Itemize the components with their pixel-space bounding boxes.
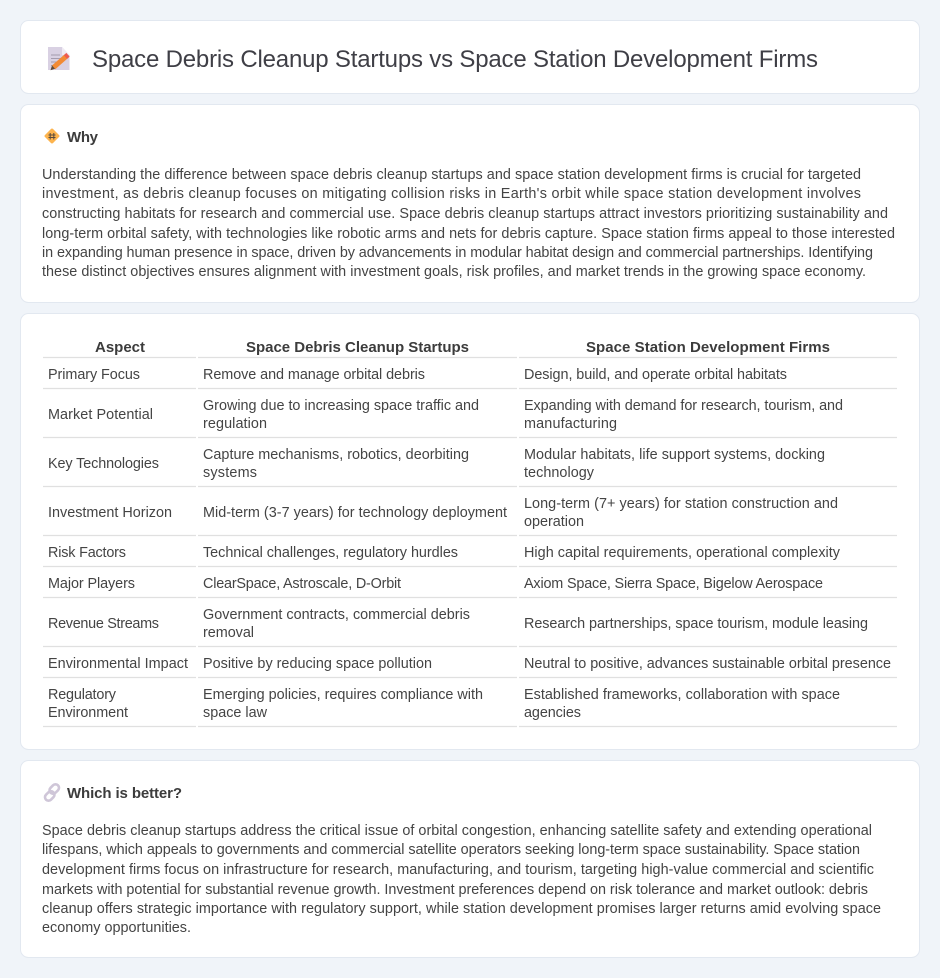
text block: which is better paragraph: lifespans, which appeals to governments and commercial satellite operators seeking long-term space sustainability. Space station bbox=[42, 842, 860, 858]
row: market potential: Growing due to increasing space traffic and bbox=[203, 398, 479, 414]
row: regulatory environment: Established frameworks, collaboration with space bbox=[524, 687, 840, 703]
heading: why: Why bbox=[67, 129, 99, 146]
row: market potential: Expanding with demand for research, tourism, and bbox=[524, 398, 843, 414]
row: revenue streams: removal bbox=[203, 625, 254, 641]
text block: which is better paragraph: cleanup offers strategic importance with regulatory support, while station development promises larger returns amid evolving space bbox=[42, 901, 881, 917]
row: environmental impact: Neutral to positive, advances sustainable orbital presence bbox=[524, 656, 891, 672]
title: Space Debris Cleanup Startups vs Space Station Development Firms bbox=[92, 46, 818, 73]
row: major players: Axiom Space, Sierra Space, Bigelow Aerospace bbox=[524, 576, 823, 592]
text block: why paragraph: long-term orbital safety, with technologies like robotic arms and nets for debris capture. Space station firms appeal to those interested bbox=[42, 226, 895, 242]
table header row: Aspect bbox=[95, 339, 145, 356]
row: primary focus: Remove and manage orbital debris bbox=[203, 367, 425, 383]
text block: which is better paragraph: Space debris cleanup startups address the critical issue of orbital congestion, enhancing satellite safety and extending operational bbox=[42, 823, 872, 839]
row: environmental impact bbox=[48, 656, 891, 672]
text block: why paragraph: constructing habitats for research and commercial use. Space debris cleanup startups attract investors prioritizing sustainability and bbox=[42, 206, 888, 222]
row: regulatory environment: Regulatory bbox=[48, 687, 117, 703]
row: key technologies bbox=[48, 447, 825, 481]
panel: comparison table bbox=[20, 314, 920, 750]
row: market potential: regulation bbox=[203, 416, 267, 432]
row: risk factors: Risk Factors bbox=[48, 545, 126, 561]
text block: which is better paragraph: markets with potential for substantial revenue growth. Investment preferences depend on risk tolerance and market outlook: debris bbox=[42, 882, 868, 898]
row: environmental impact: Positive by reducing space pollution bbox=[203, 656, 432, 672]
row: key technologies: Capture mechanisms, robotics, deorbiting bbox=[203, 447, 469, 463]
row: risk factors bbox=[48, 545, 841, 561]
table header row bbox=[95, 339, 830, 356]
text block: why paragraph bbox=[42, 167, 895, 280]
row: investment horizon: Long-term (7+ years) for station construction and bbox=[524, 496, 838, 512]
panel: why bbox=[20, 104, 920, 302]
row: regulatory environment: Environment bbox=[48, 705, 128, 721]
row: major players: Major Players bbox=[48, 576, 135, 592]
row: environmental impact: Environmental Impact bbox=[48, 656, 188, 672]
icon: warning diamond bbox=[44, 128, 60, 144]
row: risk factors: High capital requirements, operational complexity bbox=[524, 545, 841, 561]
row: regulatory environment: agencies bbox=[524, 705, 581, 721]
row: primary focus bbox=[48, 367, 787, 383]
table header row: Space Debris Cleanup Startups bbox=[246, 339, 469, 356]
text block: why paragraph: Understanding the difference between space debris cleanup startups and space station development firms is crucial for targeted bbox=[42, 167, 861, 183]
icon: chain link bbox=[44, 783, 60, 802]
row: regulatory environment: space law bbox=[203, 705, 268, 721]
text block: why paragraph: these distinct objectives ensures alignment with investment goals, risk profiles, and market trends in the growing space economy. bbox=[42, 264, 866, 280]
icon: document with pencil bbox=[48, 47, 70, 70]
row: primary focus: Primary Focus bbox=[48, 367, 140, 383]
text block: which is better paragraph: development firms focus on infrastructure for research, manufacturing, and tourism, targeting high-value commercial and scientific bbox=[42, 862, 874, 878]
row: investment horizon: operation bbox=[524, 514, 584, 530]
heading: which is better: Which is better? bbox=[67, 785, 182, 802]
row: regulatory environment: Emerging policies, requires compliance with bbox=[203, 687, 483, 703]
text block: why paragraph: in expanding human presence in space, driven by advancements in modular habitat design and commercial partnerships. Identifying bbox=[42, 245, 873, 261]
row: market potential bbox=[48, 398, 843, 432]
row: market potential: manufacturing bbox=[524, 416, 617, 432]
row: key technologies: Modular habitats, life support systems, docking bbox=[524, 447, 825, 463]
panel: which is better bbox=[20, 760, 920, 958]
row: key technologies: systems bbox=[203, 465, 257, 481]
row: key technologies: technology bbox=[524, 465, 595, 481]
text block: which is better paragraph bbox=[42, 823, 881, 936]
row: primary focus: Design, build, and operate orbital habitats bbox=[524, 367, 787, 383]
table header row: Space Station Development Firms bbox=[586, 339, 830, 356]
row: revenue streams: Research partnerships, space tourism, module leasing bbox=[524, 616, 868, 632]
panel: title card bbox=[20, 20, 920, 94]
row: investment horizon bbox=[48, 496, 838, 530]
row: risk factors: Technical challenges, regulatory hurdles bbox=[203, 545, 458, 561]
row: revenue streams: Revenue Streams bbox=[48, 616, 159, 632]
row: investment horizon: Investment Horizon bbox=[48, 505, 172, 521]
row: key technologies: Key Technologies bbox=[48, 456, 159, 472]
text block: which is better paragraph: economy opportunities. bbox=[42, 920, 191, 936]
row: market potential: Market Potential bbox=[48, 407, 153, 423]
row: revenue streams: Government contracts, commercial debris bbox=[203, 607, 470, 623]
text block: why paragraph: investment, as debris cleanup focuses on mitigating collision risks in Earth's orbit while space station development involves bbox=[42, 186, 861, 202]
row: revenue streams bbox=[48, 607, 868, 641]
row: major players bbox=[48, 576, 823, 592]
row: investment horizon: Mid-term (3-7 years) for technology deployment bbox=[203, 505, 507, 521]
row: regulatory environment bbox=[48, 687, 840, 721]
row: major players: ClearSpace, Astroscale, D-Orbit bbox=[203, 576, 401, 592]
